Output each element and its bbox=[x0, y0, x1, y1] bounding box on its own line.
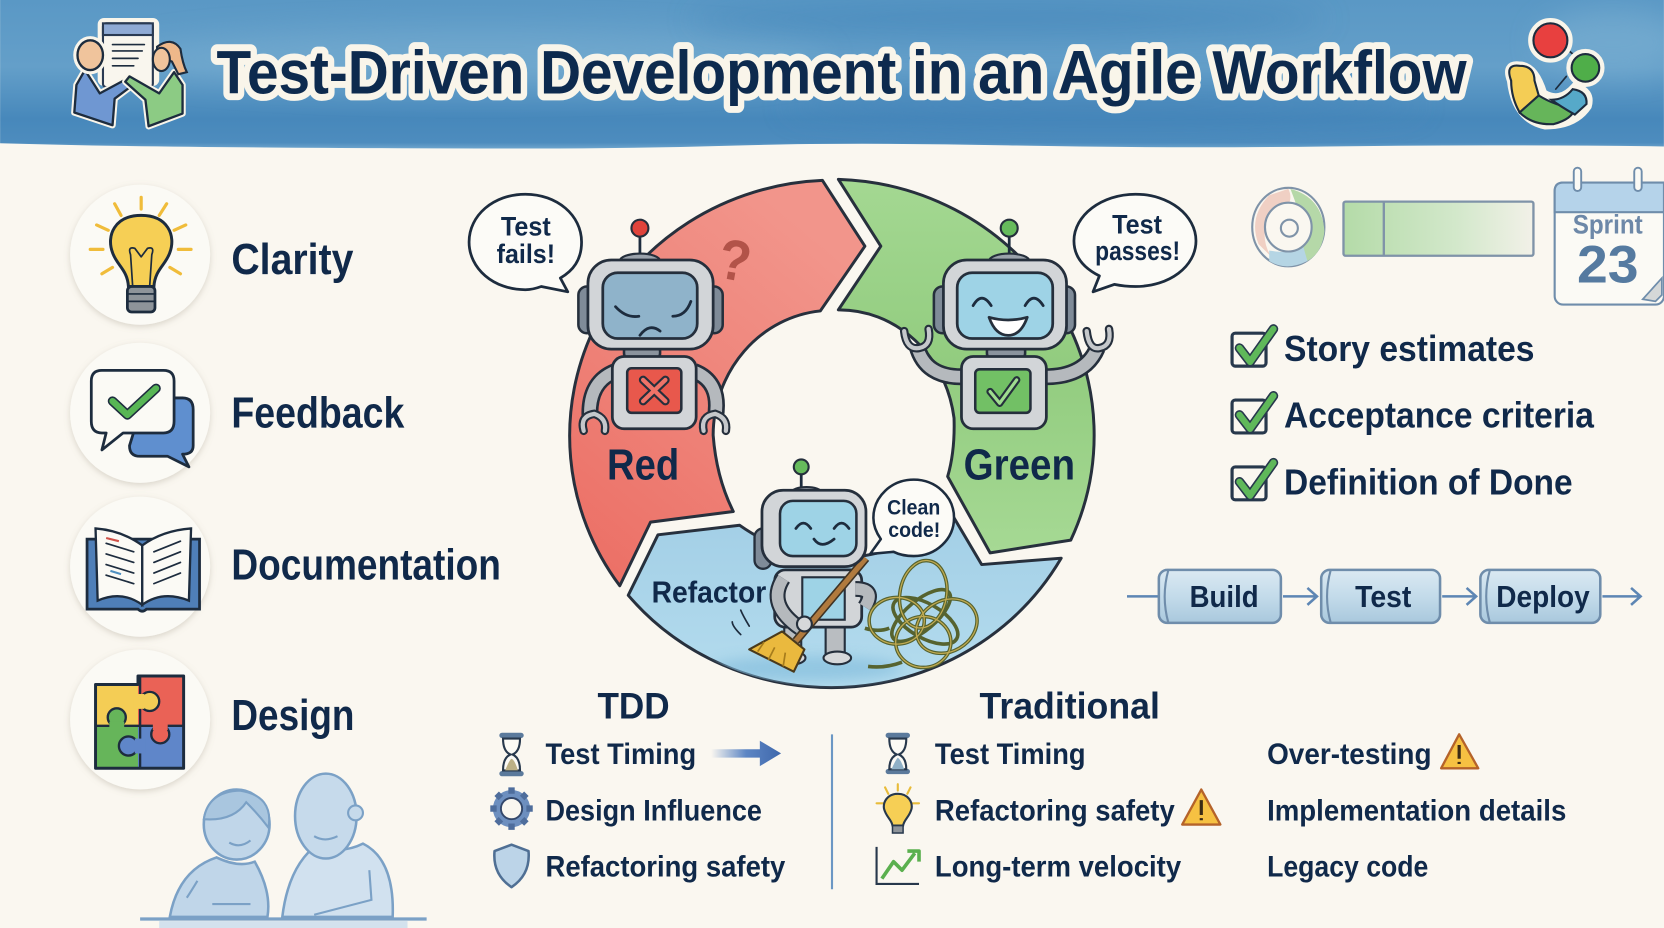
icon: warning bbox=[1182, 790, 1220, 825]
bubble: test fails: Test bbox=[501, 212, 551, 242]
item: over-testing: Over-testing bbox=[1267, 738, 1432, 771]
bubble: test passes bbox=[1074, 194, 1196, 292]
benefit: feedback bbox=[70, 343, 405, 483]
icon: cycle balls bbox=[1509, 21, 1601, 125]
bubble: test fails: fails! bbox=[497, 239, 555, 269]
benefit: design bbox=[70, 649, 354, 790]
row: traditional long-term velocity: Long-term velocity bbox=[935, 851, 1182, 884]
benefit: documentation bbox=[70, 497, 501, 637]
icon: speech bubbles with check bbox=[91, 370, 193, 467]
row: traditional refactoring safety: Refactoring safety bbox=[935, 794, 1175, 827]
panel: build test deploy pipeline bbox=[1127, 570, 1641, 623]
robot: green happy bbox=[904, 220, 1110, 429]
label: clarity: Clarity bbox=[231, 236, 353, 284]
bubble: clean code: code! bbox=[888, 519, 940, 542]
icon: mini cycle ring bbox=[1252, 188, 1324, 266]
arrow: into build bbox=[1127, 595, 1159, 598]
title: Test-Driven Development in an Agile Workflow bbox=[217, 38, 1467, 107]
icon: lightbulb bbox=[90, 197, 191, 312]
stage: build: Build bbox=[1190, 579, 1259, 614]
bubble: clean code: Clean bbox=[887, 497, 940, 520]
heading: traditional: Traditional bbox=[980, 684, 1160, 726]
chart: TDD cycle ring bbox=[469, 179, 1196, 688]
stage: test bbox=[1321, 570, 1440, 623]
row: tdd test timing bbox=[502, 735, 781, 774]
row: tdd refactoring safety bbox=[494, 845, 786, 887]
panel: TDD vs traditional comparison bbox=[490, 684, 1566, 889]
item: implementation details: Implementation details bbox=[1267, 794, 1566, 827]
row: tdd design influence: Design Influence bbox=[545, 794, 762, 827]
arrow: test to deploy bbox=[1442, 588, 1476, 605]
row: tdd refactoring safety: Refactoring safety bbox=[545, 851, 786, 884]
arrow: tdd timing bbox=[711, 741, 781, 766]
segment: green bbox=[838, 179, 1094, 553]
divider bbox=[831, 734, 833, 889]
row: tdd test timing: Test Timing bbox=[545, 738, 696, 771]
robot: blue sweeping bbox=[732, 459, 869, 672]
stage: deploy: Deploy bbox=[1496, 579, 1590, 614]
panel: sprint progress bbox=[1252, 168, 1664, 305]
icon: hourglass bbox=[888, 735, 907, 771]
icon: bulb bbox=[877, 784, 919, 833]
icon: tangled code bbox=[865, 557, 987, 667]
icon: two people with document bbox=[74, 21, 187, 126]
label: green: Green bbox=[964, 442, 1075, 490]
progress bar bbox=[1343, 202, 1533, 256]
icon: calendar sprint 23: 23 bbox=[1577, 235, 1638, 294]
arrow: out of deploy bbox=[1602, 588, 1641, 605]
icon: open book bbox=[87, 528, 200, 611]
header banner bbox=[0, 0, 1664, 149]
panel: checklist bbox=[1232, 328, 1595, 503]
icon: warning bbox=[1441, 734, 1478, 768]
icon: question mark: ? bbox=[713, 227, 756, 295]
panel: benefits list bbox=[70, 185, 501, 790]
item: definition of done: Definition of Done bbox=[1284, 462, 1573, 503]
item: story estimates: Story estimates bbox=[1284, 328, 1534, 369]
segment: red bbox=[570, 180, 865, 586]
stage: build bbox=[1159, 570, 1281, 623]
bubble: test passes: passes! bbox=[1095, 236, 1180, 266]
icon: hourglass bbox=[502, 735, 521, 774]
icon: puzzle bbox=[96, 676, 184, 768]
row: traditional test timing bbox=[888, 735, 1086, 771]
heading: TDD: TDD bbox=[597, 684, 670, 726]
label: red: Red bbox=[607, 442, 679, 490]
stage: test: Test bbox=[1355, 579, 1411, 614]
illustration: two people at table bbox=[140, 774, 427, 928]
label: documentation: Documentation bbox=[231, 541, 501, 589]
bubble: test passes: Test bbox=[1112, 209, 1162, 239]
icon: shield bbox=[494, 845, 529, 887]
stage: deploy bbox=[1480, 570, 1600, 623]
item: legacy code: Legacy code bbox=[1267, 851, 1428, 884]
arrow: build to test bbox=[1283, 588, 1317, 605]
row: traditional refactoring safety bbox=[877, 784, 1220, 833]
row: traditional test timing: Test Timing bbox=[935, 738, 1086, 771]
robot: red sad bbox=[578, 220, 726, 431]
row: traditional long-term velocity bbox=[877, 847, 1182, 884]
label: feedback: Feedback bbox=[231, 390, 405, 438]
row: tdd design influence bbox=[490, 787, 762, 830]
segment: blue bbox=[628, 518, 1061, 688]
label: refactor: Refactor bbox=[652, 575, 766, 610]
bubble: clean code bbox=[870, 480, 954, 556]
icon: gear bbox=[490, 787, 533, 830]
icon: growth chart bbox=[877, 847, 919, 884]
icon: calendar sprint 23: Sprint bbox=[1573, 209, 1643, 239]
label: design: Design bbox=[231, 692, 354, 740]
icon: calendar sprint 23 bbox=[1555, 168, 1664, 305]
item: acceptance criteria: Acceptance criteria bbox=[1284, 395, 1595, 436]
benefit: clarity bbox=[70, 185, 353, 325]
bubble: test fails bbox=[469, 194, 582, 292]
